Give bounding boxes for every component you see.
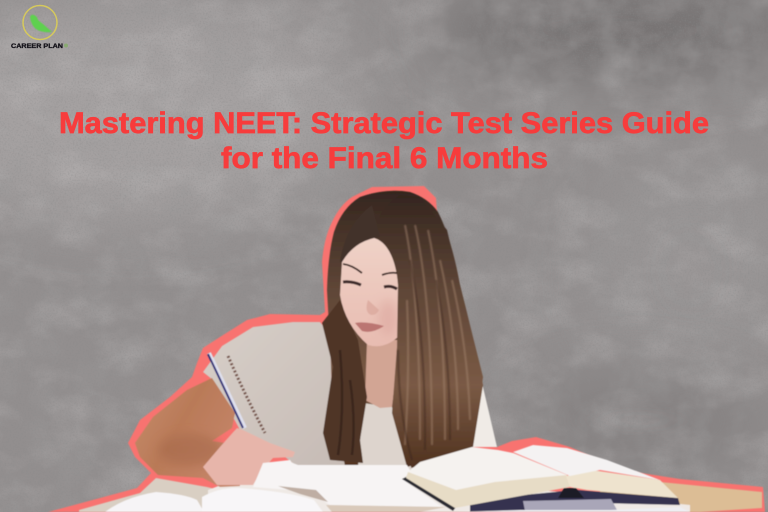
right book right page top [513, 445, 660, 480]
face [340, 237, 400, 346]
underlying books [470, 490, 680, 512]
logo wordmark: CAREER PLAN [11, 43, 63, 50]
arm [135, 378, 240, 487]
right book spine edge [402, 477, 456, 511]
logo: Career Plan [11, 6, 68, 50]
pen [209, 353, 245, 428]
cheek shading [378, 300, 398, 336]
right book left page top [408, 447, 567, 490]
shirt trim [228, 356, 265, 433]
hair back [327, 191, 483, 472]
eyes [343, 282, 397, 289]
hair highlights [405, 225, 470, 445]
right book right page block [566, 470, 678, 498]
table left [79, 478, 260, 512]
eyebrows [343, 264, 397, 275]
logo green accent [64, 44, 68, 48]
logo ring [23, 6, 57, 40]
title [59, 107, 709, 175]
hand [203, 428, 295, 485]
hair fringe [340, 205, 380, 262]
hair front right [372, 195, 483, 467]
logo bird icon [30, 15, 52, 32]
book page edges under center book [326, 505, 446, 512]
book gutter [558, 488, 584, 498]
left hair strand [322, 300, 367, 463]
right book left page block [406, 453, 570, 508]
arm shading [158, 434, 222, 466]
coral cut-out outline [48, 186, 765, 512]
table right [600, 481, 762, 512]
bottom left notebooks [105, 492, 204, 512]
shirt [203, 322, 345, 466]
nose [367, 300, 379, 315]
center open book left page [253, 460, 317, 497]
base of books [208, 462, 690, 512]
shirt right sleeve [472, 377, 497, 447]
title line 2: for the Final 6 Months [221, 142, 548, 175]
title line 1: Mastering NEET: Strategic Test Series Guide [59, 107, 709, 140]
student illustration [79, 191, 762, 512]
coral gap between arm and shirt [211, 427, 240, 441]
neck [365, 340, 400, 408]
center open book right page [290, 462, 442, 507]
lips [355, 322, 384, 332]
